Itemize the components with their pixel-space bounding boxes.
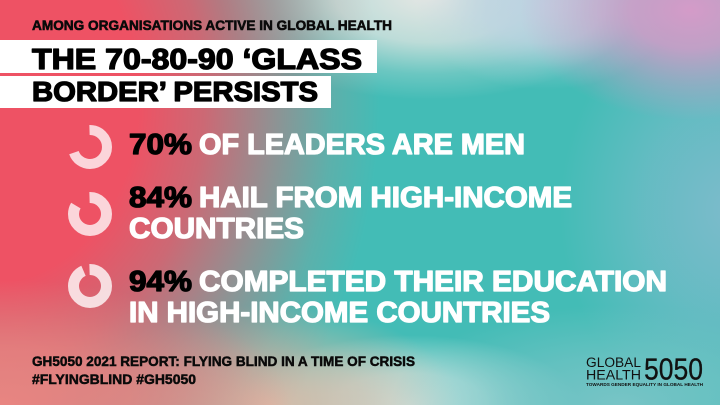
donut: 94% <box>74 270 106 302</box>
text: 70% of leaders are men: OF LEADERS ARE MEN <box>199 129 525 161</box>
logo: Global Health 5050: GLOBAL <box>586 355 641 370</box>
text: 94% completed their education in high-income countries <box>129 266 667 329</box>
logo: Global Health 5050: HEALTH <box>586 368 641 382</box>
logo: Global Health 5050 <box>586 352 703 387</box>
text: 94% completed their education in high-income countries: COMPLETED THEIR EDUCATION <box>199 266 667 298</box>
footer text: #FLYINGBLIND #GH5050 <box>32 371 196 387</box>
title line 2: BORDER’ PERSISTS <box>32 76 318 107</box>
footer text: GH5050 2021 REPORT: FLYING BLIND IN A TIME OF CRISIS <box>32 353 415 369</box>
stat 2: income <box>74 182 572 245</box>
logo: Global Health 5050: 5050 <box>644 352 703 386</box>
footer text <box>32 353 415 387</box>
donut: 84% <box>74 198 106 230</box>
stat 3: education <box>74 266 667 329</box>
text: 84% hail from high-income countries <box>129 182 572 245</box>
kicker text: AMONG ORGANISATIONS ACTIVE IN GLOBAL HEALTH <box>32 17 392 33</box>
text: 70% of leaders are men: 70% <box>129 129 192 161</box>
stat 1: leaders <box>73 129 525 164</box>
text: 84% hail from high-income countries: COUNTRIES <box>129 213 304 245</box>
logo: Global Health 5050: TOWARDS GENDER EQUALITY IN GLOBAL HEALTH <box>586 382 703 387</box>
title line 1: THE 70-80-90 ‘GLASS <box>32 44 362 76</box>
donut: 70% <box>73 130 107 164</box>
title <box>0 40 377 108</box>
text: 94% completed their education in high-income countries: 94% <box>129 266 192 298</box>
text: 94% completed their education in high-income countries: IN HIGH-INCOME COUNTRIES <box>129 297 550 329</box>
text: 84% hail from high-income countries: 84% <box>129 182 192 214</box>
text: 84% hail from high-income countries: HAIL FROM HIGH-INCOME <box>199 182 572 214</box>
